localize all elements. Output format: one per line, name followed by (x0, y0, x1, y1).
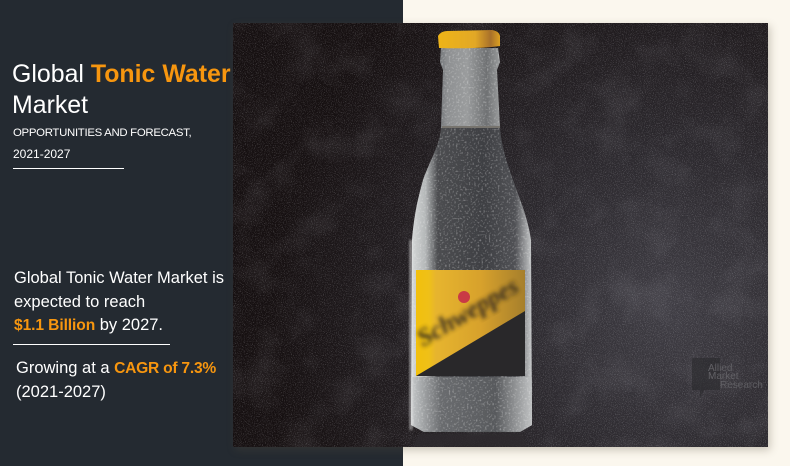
label black area (416, 270, 525, 376)
bottle glass body (411, 48, 532, 432)
blurred brand wordmark: Schweppes (412, 273, 523, 352)
bottle neck (440, 48, 500, 128)
bottle base (411, 377, 532, 432)
label yellow area (416, 270, 525, 376)
red seal (458, 291, 470, 303)
liquid line (442, 126, 500, 128)
logo text: Research (720, 380, 763, 391)
base reflection (412, 433, 528, 447)
subtitle: OPPORTUNITIES AND FORECAST, (13, 127, 191, 139)
bottle (409, 30, 532, 447)
watermark logo (692, 358, 763, 398)
market value text: expected to reach (14, 292, 145, 310)
CAGR text: (2021-2027) (16, 382, 106, 400)
label (412, 270, 525, 376)
background mottling (233, 23, 768, 447)
title: Global Tonic Water (12, 60, 231, 88)
market value text: $1.1 Billion by 2027. (14, 316, 163, 334)
CAGR text: Growing at a CAGR of 7.3% (16, 359, 216, 377)
photo: tonic water bottle (233, 23, 768, 447)
bottle cap (438, 30, 500, 48)
photo background (233, 23, 768, 447)
background grain (233, 23, 768, 447)
left highlight (409, 240, 413, 430)
title: Market (12, 91, 88, 119)
logo text: Market (708, 371, 739, 382)
logo mark (692, 358, 720, 398)
divider line (13, 168, 124, 169)
subtitle: 2021-2027 (13, 147, 70, 161)
panel: dark left background (0, 0, 403, 466)
market value text: Global Tonic Water Market is (14, 269, 224, 287)
divider line (13, 344, 170, 345)
panel: cream right background (403, 0, 790, 466)
CAGR text (16, 359, 216, 400)
market value text (14, 269, 224, 334)
subtitle (13, 127, 191, 161)
condensation droplets (411, 48, 532, 432)
logo text: Allied (708, 363, 732, 374)
title (12, 60, 231, 119)
